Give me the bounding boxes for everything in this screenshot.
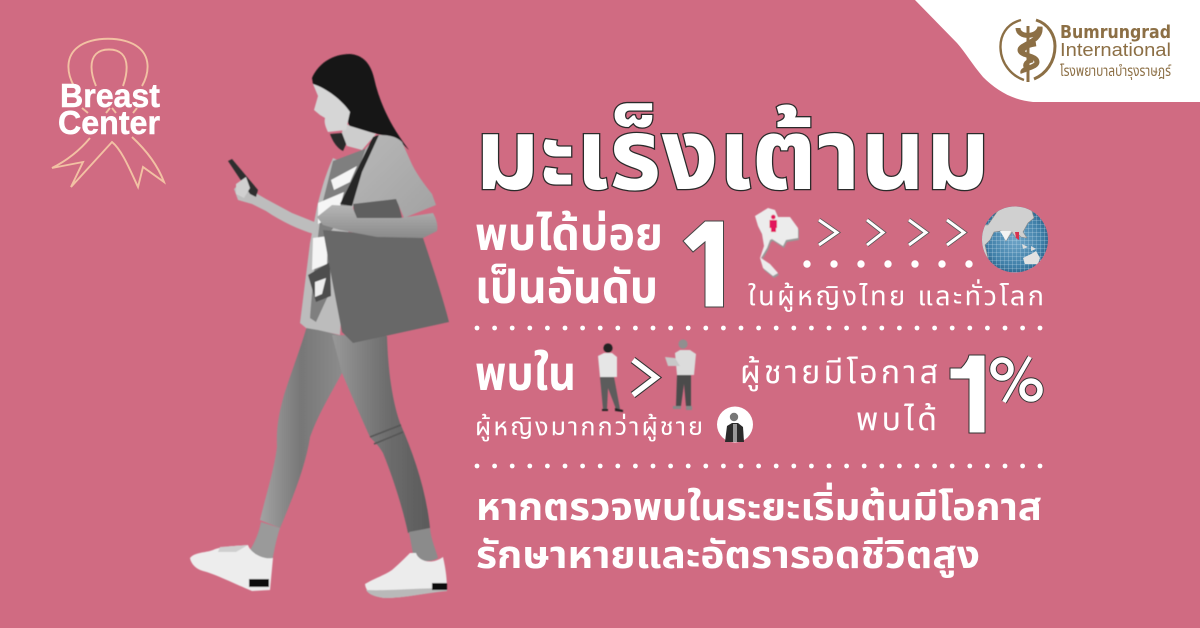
- logo wordmark: International: [1060, 40, 1171, 60]
- icon: red woman: [770, 215, 777, 232]
- number 1: [683, 221, 724, 307]
- breast center ribbon logo: [52, 39, 164, 187]
- printed top: [310, 147, 370, 322]
- sweater sleeve and shoulder: [353, 135, 436, 218]
- subtext: thai women and worldwide: ในผู้หญิงไทย และทั่วโลก: [748, 279, 1044, 312]
- heading: most common: พบได้บ่อย: [475, 208, 663, 260]
- arm holding phone: [234, 180, 317, 234]
- divider dots 2: [475, 464, 1042, 468]
- closing message: รักษาหายและอัตรารอดชีวิตสูง: [476, 535, 980, 578]
- forearm across bag: [317, 205, 437, 238]
- logo wordmark: Bumrungrad: [1060, 22, 1171, 43]
- logo wordmark: [1060, 22, 1172, 80]
- text: men have a chance: ผู้ชายมีโอกาส: [740, 354, 938, 392]
- logo wordmark: โรงพยาบาลบำรุงราษฎร์: [1060, 63, 1172, 80]
- divider dots 1: [475, 326, 1042, 330]
- bag upper part: [353, 198, 402, 220]
- icon: globe: [982, 206, 1048, 272]
- arrows: thailand to world: [819, 220, 964, 245]
- breast center wordmark: [58, 77, 160, 141]
- breast center wordmark: Breast: [60, 77, 160, 114]
- icon: man in circle: [717, 406, 753, 442]
- number 1 percent: [950, 355, 1040, 433]
- front shoe: [365, 553, 447, 598]
- hair lock under chin: [330, 133, 348, 151]
- heading: most common: เป็นอันดับ: [475, 261, 658, 313]
- back ankle: [250, 522, 280, 562]
- walking woman photo: [190, 54, 449, 598]
- neck: [342, 122, 376, 150]
- icon: man figure: [665, 339, 696, 410]
- back leg: [260, 326, 342, 528]
- face: [313, 84, 350, 132]
- icon: thailand map: [755, 208, 799, 278]
- closing message: หากตรวจพบในระยะเริ่มต้นมีโอกาส: [476, 482, 1042, 529]
- ribbon outline: [52, 39, 164, 187]
- text: men have a chance: [740, 354, 938, 437]
- phone: [228, 159, 258, 197]
- subtext: women more than men: ผู้หญิงมากกว่าผู้ชาย: [475, 413, 703, 442]
- hair: [312, 54, 409, 150]
- percent sign: [993, 357, 1040, 402]
- dots: thai map to globe: [803, 260, 973, 268]
- logo panel: [915, 0, 1200, 102]
- heading: found in: พบใน: [475, 348, 576, 401]
- back shoe: [190, 545, 273, 591]
- bag strap: [340, 135, 379, 206]
- front leg: [332, 335, 430, 533]
- cardigan left panel: [300, 158, 360, 335]
- icon: woman figure: [598, 343, 623, 412]
- breast center wordmark: Center: [58, 104, 160, 141]
- closing message: [476, 482, 1042, 578]
- front ankle: [409, 528, 438, 561]
- greater-than symbol: [633, 360, 656, 395]
- hospital logo emblem: [1000, 20, 1055, 82]
- text: men have a chance: พบได้: [856, 401, 937, 437]
- bag: [323, 230, 449, 343]
- heading: most common: [475, 208, 663, 313]
- title: มะเร็งเต้านม: [475, 99, 990, 211]
